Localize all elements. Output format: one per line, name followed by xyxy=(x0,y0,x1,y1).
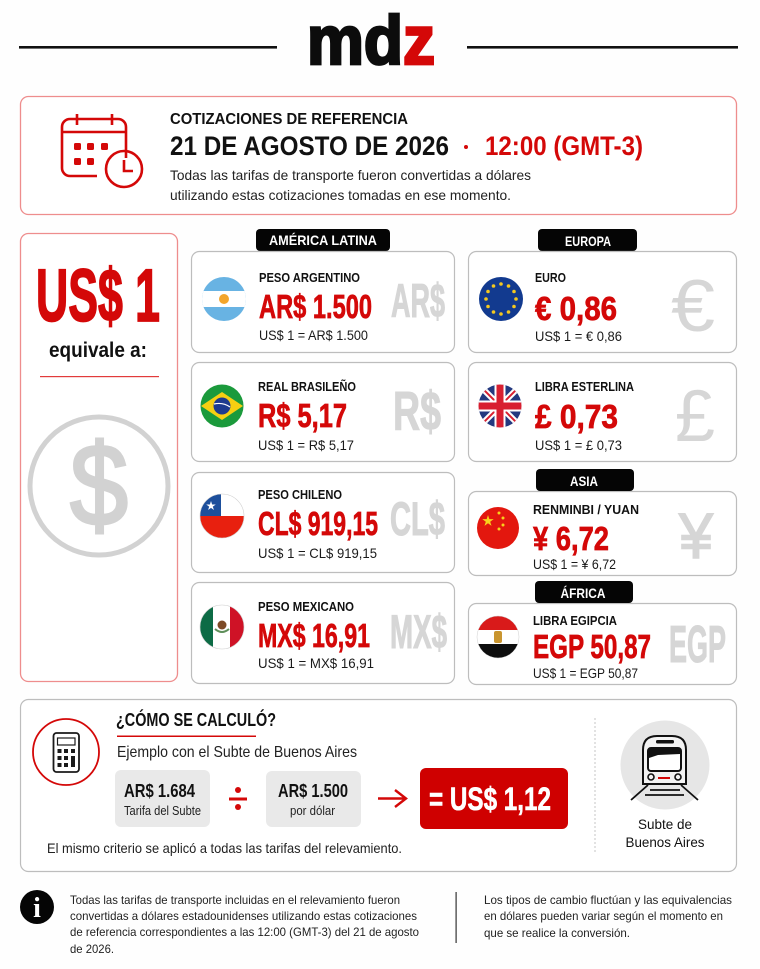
date and time: 12:00 (GMT-3) xyxy=(485,131,643,161)
card: peso mexicano: MX$ 16,91 xyxy=(258,617,370,654)
card: renminbi yuan: RENMINBI / YUAN xyxy=(533,502,639,517)
icon: info: i xyxy=(33,893,41,924)
icon: info xyxy=(20,890,54,924)
card: libra esterlina: LIBRA ESTERLINA xyxy=(535,379,635,394)
box: tarifa del subte: Tarifa del Subte xyxy=(124,804,201,818)
flag: European Union xyxy=(479,277,523,321)
flag: United Kingdom xyxy=(478,384,522,428)
footnote: right: en dólares pueden variar según el momento en xyxy=(484,909,723,923)
card: peso argentino: US$ 1 = AR$ 1.500 xyxy=(259,327,368,343)
tag: América Latina: AMÉRICA LATINA xyxy=(269,232,377,248)
card: libra esterlina: £ 0,73 xyxy=(535,398,618,435)
footnote: left xyxy=(70,893,419,956)
card: euro: € 0,86 xyxy=(535,290,617,327)
description text xyxy=(170,167,531,203)
card: peso mexicano xyxy=(192,582,454,684)
tag: África: ÁFRICA xyxy=(560,585,606,601)
card: euro: € xyxy=(671,266,715,347)
card: peso chileno: CL$ xyxy=(390,492,445,545)
footnote: right: que se realice la conversión. xyxy=(484,926,630,940)
flag: Chile xyxy=(200,494,244,538)
footnote: left: de referencia correspondientes a las 12:00 (GMT-3) del 21 de agosto xyxy=(70,925,419,939)
description text: utilizando estas cotizaciones tomadas en ese momento. xyxy=(170,187,511,203)
card: renminbi yuan xyxy=(468,492,736,576)
card: euro: EURO xyxy=(535,270,566,285)
result box: = US$ 1,12 xyxy=(429,781,551,817)
card: real brasileño: REAL BRASILEÑO xyxy=(258,379,356,394)
card: real brasileño: R$ 5,17 xyxy=(258,397,347,434)
card: real brasileño: R$ xyxy=(393,380,441,442)
example subtitle: Ejemplo con el Subte de Buenos Aires xyxy=(117,744,357,761)
card: renminbi yuan: ¥ xyxy=(678,500,713,572)
date and time xyxy=(170,131,643,161)
arrow xyxy=(378,790,406,807)
icon: calculator xyxy=(33,719,99,785)
card: libra esterlina xyxy=(468,362,736,462)
flag: Brazil xyxy=(200,384,244,428)
flag: Argentina xyxy=(202,277,246,321)
flag: Mexico xyxy=(200,605,244,649)
icon: dollar coin: $ xyxy=(70,420,128,550)
description text: Todas las tarifas de transporte fueron convertidas a dólares xyxy=(170,167,531,183)
card: euro: US$ 1 = € 0,86 xyxy=(535,328,622,344)
caption: Subte de Buenos Aires xyxy=(626,816,704,850)
card: peso argentino: PESO ARGENTINO xyxy=(259,270,360,285)
box: tarifa del subte xyxy=(115,770,210,827)
box: por dólar: por dólar xyxy=(290,803,336,818)
flag: China xyxy=(477,507,519,549)
card: peso mexicano: MX$ xyxy=(390,605,447,658)
tag: Asia: ASIA xyxy=(570,473,598,489)
card: peso mexicano: US$ 1 = MX$ 16,91 xyxy=(258,655,374,671)
footnote: left: Todas las tarifas de transporte incluidas en el relevamiento fueron xyxy=(70,893,400,907)
tag: África xyxy=(535,581,633,603)
icon: dollar coin xyxy=(30,417,168,555)
card: libra egipcia: US$ 1 = EGP 50,87 xyxy=(533,665,638,681)
tag: Europa: EUROPA xyxy=(565,233,611,249)
footnote: right: Los tipos de cambio fluctúan y las equivalencias xyxy=(484,893,732,907)
card: libra egipcia: LIBRA EGIPCIA xyxy=(533,613,618,628)
card: real brasileño xyxy=(192,362,454,462)
card: peso chileno: PESO CHILENO xyxy=(258,487,342,502)
card: peso chileno: CL$ 919,15 xyxy=(258,505,378,542)
footnote: right xyxy=(484,893,732,940)
result box xyxy=(420,768,568,829)
icon: subway train xyxy=(620,720,710,810)
big value US$ 1: US$ 1 xyxy=(36,254,160,337)
tag: Asia xyxy=(536,469,634,491)
card: renminbi yuan: US$ 1 = ¥ 6,72 xyxy=(533,556,616,572)
card: renminbi yuan: ¥ 6,72 xyxy=(533,520,609,557)
card: peso chileno xyxy=(192,472,454,572)
equivale a: equivale a: xyxy=(49,339,147,362)
card: libra egipcia xyxy=(468,604,736,684)
caption: Subte de Buenos Aires: Buenos Aires xyxy=(626,834,704,850)
flag: Egypt xyxy=(478,616,518,658)
icon: calendar with clock xyxy=(62,114,142,187)
tag: América Latina xyxy=(256,229,390,251)
criterion note: El mismo criterio se aplicó a todas las tarifas del relevamiento. xyxy=(47,840,402,856)
panel: cómo se calculó xyxy=(20,700,736,872)
card: libra esterlina: US$ 1 = £ 0,73 xyxy=(535,437,622,453)
panel: cotizaciones de referencia xyxy=(20,96,736,214)
panel: US$ 1 equivale a xyxy=(20,234,178,682)
card: peso mexicano: PESO MEXICANO xyxy=(258,599,354,614)
heading: cómo se calculó: ¿CÓMO SE CALCULÓ? xyxy=(116,709,276,730)
logo: mdz: mdz xyxy=(307,2,435,79)
card: peso chileno: US$ 1 = CL$ 919,15 xyxy=(258,545,377,561)
card: real brasileño: US$ 1 = R$ 5,17 xyxy=(258,437,354,453)
footnote: left: de 2026. xyxy=(70,942,114,956)
tag: Europa xyxy=(538,229,637,251)
division sign xyxy=(229,787,247,810)
heading: cotizaciones de referencia: COTIZACIONES DE REFERENCIA xyxy=(170,111,408,128)
card: euro xyxy=(468,252,736,352)
card: peso argentino xyxy=(192,252,454,352)
date and time: 21 DE AGOSTO DE 2026 xyxy=(170,131,449,161)
box: por dólar: AR$ 1.500 xyxy=(278,781,348,801)
card: libra esterlina: £ xyxy=(675,376,715,457)
card: peso argentino: AR$ xyxy=(391,274,445,327)
caption: Subte de Buenos Aires: Subte de xyxy=(638,816,692,832)
card: peso argentino: AR$ 1.500 xyxy=(259,288,372,325)
box: por dólar xyxy=(266,771,361,827)
box: tarifa del subte: AR$ 1.684 xyxy=(124,781,195,801)
card: libra egipcia: EGP 50,87 xyxy=(533,628,651,665)
footnote: left: convertidas a dólares estadounidenses utilizando estas cotizaciones xyxy=(70,909,417,923)
